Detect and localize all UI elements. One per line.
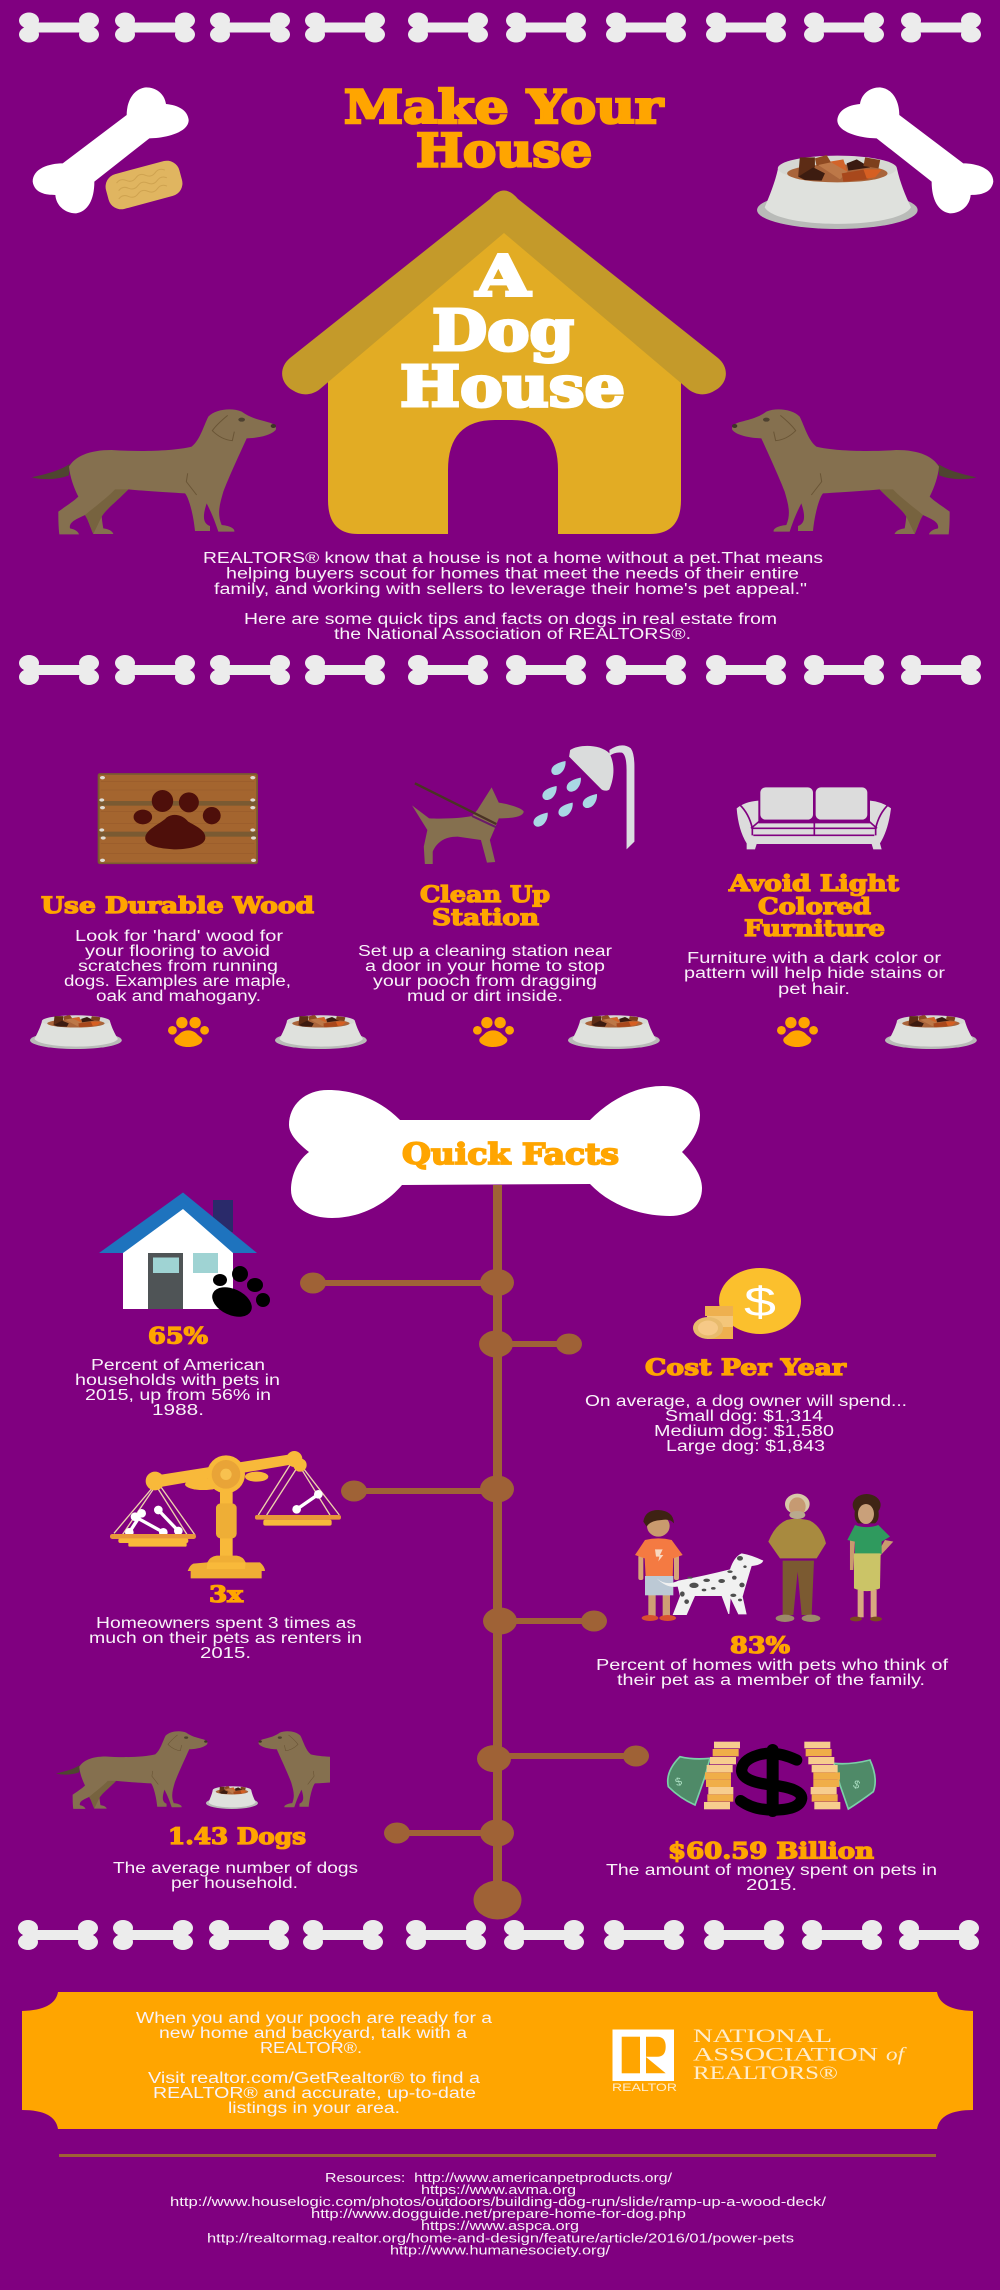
text: dogs per household: per household. xyxy=(171,1875,298,1892)
stat: 3x: 3x xyxy=(209,1582,244,1608)
text: call to action xyxy=(136,2010,492,2117)
heading: avoid light colored furniture: Avoid Light xyxy=(728,871,900,897)
icon: dollar coin: $ xyxy=(744,1278,776,1325)
text: clean up tip: a door in your home to stop xyxy=(365,958,605,975)
logo: national association of realtors xyxy=(612,2027,908,2094)
text: clean up tip: mud or dirt inside. xyxy=(407,988,563,1005)
heading: clean up station xyxy=(420,882,550,931)
intro text: the National Association of REALTORS®. xyxy=(334,626,691,643)
text: resources: https://www.avma.org xyxy=(421,2183,576,2197)
icon: wood crate with paw xyxy=(99,774,257,863)
logo: national association of realtors: NATIONAL xyxy=(693,2027,832,2047)
text: 83% description xyxy=(596,1657,949,1689)
icon: bone and food bowl xyxy=(757,87,993,229)
icon: balance scale with bones xyxy=(110,1451,341,1578)
divider rule xyxy=(59,2154,936,2157)
text: clean up tip xyxy=(358,943,612,1005)
title: Make Your xyxy=(344,80,664,134)
stat: 83%: 83% xyxy=(730,1633,790,1659)
icon: sofa xyxy=(737,787,891,849)
stat: 65%: 65% xyxy=(148,1324,208,1350)
heading: avoid light colored furniture xyxy=(728,871,900,942)
text: money spent xyxy=(606,1862,937,1894)
intro text: REALTORS® know that a house is not a home without a pet.That means xyxy=(203,550,823,567)
house title text xyxy=(400,244,625,420)
heading: avoid light colored furniture: Furniture xyxy=(744,916,885,942)
text: cost per year: Small dog: $1,314 xyxy=(665,1408,823,1425)
title xyxy=(344,80,664,178)
text: dogs per household: The average number of dogs xyxy=(113,1860,358,1877)
text: call to action: REALTOR® and accurate, up-to-date xyxy=(153,2085,476,2102)
heading: use durable wood: Use Durable Wood xyxy=(41,893,314,919)
icon: bone and biscuit xyxy=(33,87,189,213)
second bone divider xyxy=(19,655,981,685)
text: 3x description xyxy=(89,1615,362,1662)
text: 3x description: Homeowners spent 3 times as xyxy=(96,1615,356,1632)
text: 65% description: households with pets in xyxy=(75,1372,280,1389)
logo: national association of realtors: REALTOR xyxy=(612,2082,677,2094)
text: call to action: Visit realtor.com/GetRealtor® to find a xyxy=(148,2070,480,2087)
text: money spent: The amount of money spent on pets in xyxy=(606,1862,937,1879)
heading: cost per year: Cost Per Year xyxy=(645,1355,846,1381)
top bone divider xyxy=(19,12,981,42)
text: furniture tip: pet hair. xyxy=(778,981,850,998)
text: wood tip: Look for 'hard' wood for xyxy=(75,928,283,945)
panel: call to action banner xyxy=(22,1992,973,2129)
timeline xyxy=(300,1185,649,1920)
text: resources: http://www.dogguide.net/prepare-home-for-dog.php xyxy=(311,2207,686,2221)
icon: dollar coin xyxy=(693,1268,801,1339)
text: clean up tip: Set up a cleaning station near xyxy=(358,943,612,960)
text: 3x description: much on their pets as renters in xyxy=(89,1630,362,1647)
icon: left dog xyxy=(32,409,276,534)
intro text xyxy=(203,550,823,643)
text: cost per year xyxy=(585,1393,907,1455)
icon: money stacks with dollar sign: $ xyxy=(851,1779,862,1792)
text: wood tip: your flooring to avoid xyxy=(85,943,270,960)
heading: quick facts: Quick Facts xyxy=(402,1137,619,1171)
icon: house with paw xyxy=(99,1192,270,1323)
text: cost per year: Medium dog: $1,580 xyxy=(654,1423,834,1440)
heading: avoid light colored furniture: Colored xyxy=(758,894,871,920)
text: cost per year: Large dog: $1,843 xyxy=(666,1438,825,1455)
text: resources: https://www.aspca.org xyxy=(421,2219,579,2233)
logo: national association of realtors: REALTORS® xyxy=(693,2064,838,2084)
text: resources: http://www.humanesociety.org/ xyxy=(390,2244,611,2258)
text: resources: http://realtormag.realtor.org/home-and-design/feature/article/2016/01/power-pets xyxy=(207,2232,794,2246)
text: furniture tip: pattern will help hide stains or xyxy=(684,965,945,982)
text: cost per year: On average, a dog owner will spend... xyxy=(585,1393,907,1410)
intro text: Here are some quick tips and facts on dogs in real estate from xyxy=(244,611,777,628)
heading: 1.43 dogs: 1.43 Dogs xyxy=(168,1824,306,1850)
intro text: helping buyers scout for homes that meet the needs of their entire xyxy=(226,566,799,583)
text: 3x description: 2015. xyxy=(200,1645,251,1662)
icon: money stacks with dollar sign xyxy=(668,1742,875,1811)
text: furniture tip: Furniture with a dark color or xyxy=(687,950,941,967)
big bone heading panel xyxy=(289,1086,702,1218)
text: call to action: When you and your pooch are ready for a xyxy=(136,2010,492,2027)
text: 83% description: Percent of homes with pets who think of xyxy=(596,1657,949,1674)
icon: two dogs with a bowl xyxy=(56,1731,330,1809)
logo: national association of realtors: of xyxy=(886,2046,908,2066)
icon: dog on leash and shower xyxy=(412,745,634,864)
text: wood tip: dogs. Examples are maple, xyxy=(64,973,291,990)
text: dogs per household xyxy=(113,1860,358,1892)
house title text: Dog xyxy=(432,298,574,364)
text: wood tip: oak and mahogany. xyxy=(96,988,261,1005)
text: resources: Resources: http://www.americanpetproducts.org/ xyxy=(325,2171,673,2185)
third bone divider xyxy=(18,1920,979,1950)
text: call to action: REALTOR®. xyxy=(260,2040,362,2057)
icon: money stacks with dollar sign: $ xyxy=(674,1775,684,1789)
text: 65% description xyxy=(75,1357,280,1419)
text: 65% description: Percent of American xyxy=(91,1357,265,1374)
bowls and paws row xyxy=(30,1015,977,1049)
house title text: A xyxy=(475,244,532,310)
text: 83% description: their pet as a member of the family. xyxy=(617,1672,925,1689)
title: House xyxy=(416,124,592,178)
text: call to action: listings in your area. xyxy=(228,2100,400,2117)
icon: family and dalmatian xyxy=(635,1494,893,1622)
text: 65% description: 2015, up from 56% in xyxy=(85,1387,271,1404)
text: resources xyxy=(170,2171,827,2258)
heading: clean up station: Station xyxy=(432,905,539,931)
text: wood tip: scratches from running xyxy=(78,958,278,975)
text: resources: http://www.houselogic.com/photos/outdoors/building-dog-run/slide/ramp-up-a-wood-deck/ xyxy=(170,2195,827,2209)
dog house xyxy=(282,190,726,534)
heading: $60.59 billion: $60.59 Billion xyxy=(668,1839,874,1865)
text: furniture tip xyxy=(684,950,945,998)
intro text: family, and working with sellers to leverage their home's pet appeal." xyxy=(214,581,807,598)
text: money spent: 2015. xyxy=(746,1877,797,1894)
house title text: House xyxy=(400,354,625,420)
heading: clean up station: Clean Up xyxy=(420,882,550,908)
text: call to action: new home and backyard, talk with a xyxy=(159,2025,467,2042)
text: 65% description: 1988. xyxy=(152,1402,204,1419)
text: wood tip xyxy=(64,928,291,1005)
logo: national association of realtors: ASSOCIATION xyxy=(693,2046,878,2066)
icon: right dog xyxy=(732,409,976,534)
text: clean up tip: your pooch from dragging xyxy=(373,973,597,990)
